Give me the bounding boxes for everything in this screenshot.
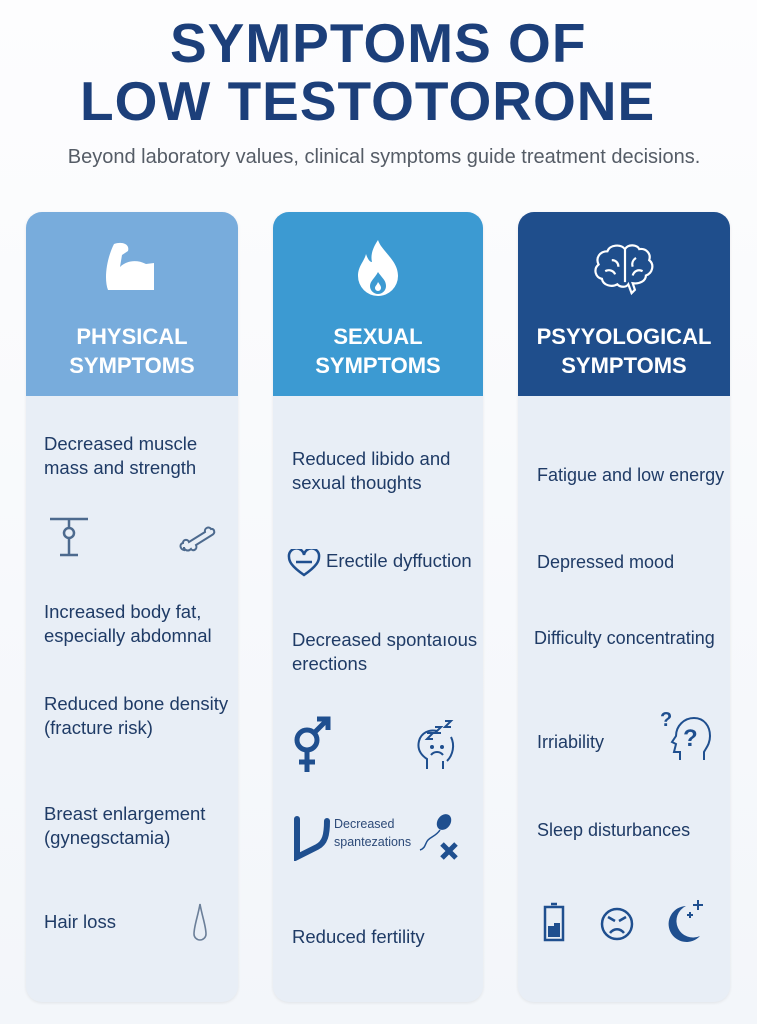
- panel: physical: Breast enlargement: [44, 803, 205, 824]
- panel: physical: Hair loss: [44, 911, 116, 932]
- header: psychological: PSYYOLOGICAL: [537, 324, 711, 349]
- subtitle: Beyond laboratory values, clinical symptoms guide treatment decisions.: [68, 146, 700, 168]
- header: psychological: SYMPTOMS: [561, 353, 687, 378]
- panel: sexual: Decreased spontaıous: [292, 629, 477, 650]
- panel: psychological: Sleep disturbances: [537, 820, 690, 840]
- panel: physical: (fracture risk): [44, 717, 153, 738]
- icon: sleepy head: [417, 720, 454, 769]
- header: sexual: [273, 212, 483, 396]
- panel: sexual: Decreased: [334, 817, 394, 831]
- panel: sexual: Reduced libido and: [292, 448, 450, 469]
- icon: question head: ?: [660, 709, 672, 731]
- panel: psychological: Fatigue and low energy: [537, 465, 724, 485]
- panel: psychological: Difficulty concentrating: [534, 628, 715, 648]
- header: physical: [26, 212, 238, 396]
- panel: psychological: [518, 212, 730, 1002]
- panel: sexual: Erectile dyffuction: [326, 550, 472, 571]
- panel: physical: Decreased muscle: [44, 433, 197, 454]
- header: sexual: SEXUAL: [333, 324, 423, 349]
- panel: sexual: [273, 212, 483, 1002]
- title: LOW TESTOTORONE: [80, 70, 655, 132]
- icon: drop: [193, 904, 207, 941]
- panel: physical: (gynegsctamia): [44, 827, 170, 848]
- header: psychological: [518, 212, 730, 396]
- panel: physical: Reduced bone density: [44, 693, 228, 714]
- panel: sexual: erections: [292, 653, 367, 674]
- icon: flame: [358, 240, 398, 296]
- icon: angry face: [600, 908, 634, 940]
- panel: physical: [26, 212, 238, 1002]
- icon: question head: [660, 709, 711, 760]
- icon: heart: [288, 549, 320, 576]
- icon: sperm x: [420, 814, 458, 860]
- panel: sexual: spantezations: [334, 835, 411, 849]
- icon: scale: [50, 518, 88, 556]
- icon: battery: [544, 902, 564, 942]
- panel: psychological: Irriability: [537, 732, 604, 752]
- icon: flexed arm: [106, 242, 154, 290]
- panel: physical: Increased body fat,: [44, 601, 201, 622]
- panel: sexual: sexual thoughts: [292, 472, 422, 493]
- header: physical: SYMPTOMS: [69, 353, 195, 378]
- panel: psychological: Depressed mood: [537, 552, 674, 572]
- icon: bone: [180, 526, 216, 552]
- title: SYMPTOMS OF: [170, 12, 586, 74]
- title: [80, 12, 655, 132]
- icon: moon stars: [668, 900, 703, 942]
- panel: physical: mass and strength: [44, 457, 196, 478]
- icon: gender symbol: [294, 716, 330, 772]
- icon: brain: [594, 244, 654, 295]
- icon: question head: ?: [683, 725, 698, 752]
- panel: physical: especially abdomnal: [44, 625, 212, 646]
- header: sexual: SYMPTOMS: [315, 353, 441, 378]
- icon: curved shape: [294, 816, 330, 861]
- panel: sexual: Reduced fertility: [292, 926, 425, 947]
- header: physical: PHYSICAL: [76, 324, 188, 349]
